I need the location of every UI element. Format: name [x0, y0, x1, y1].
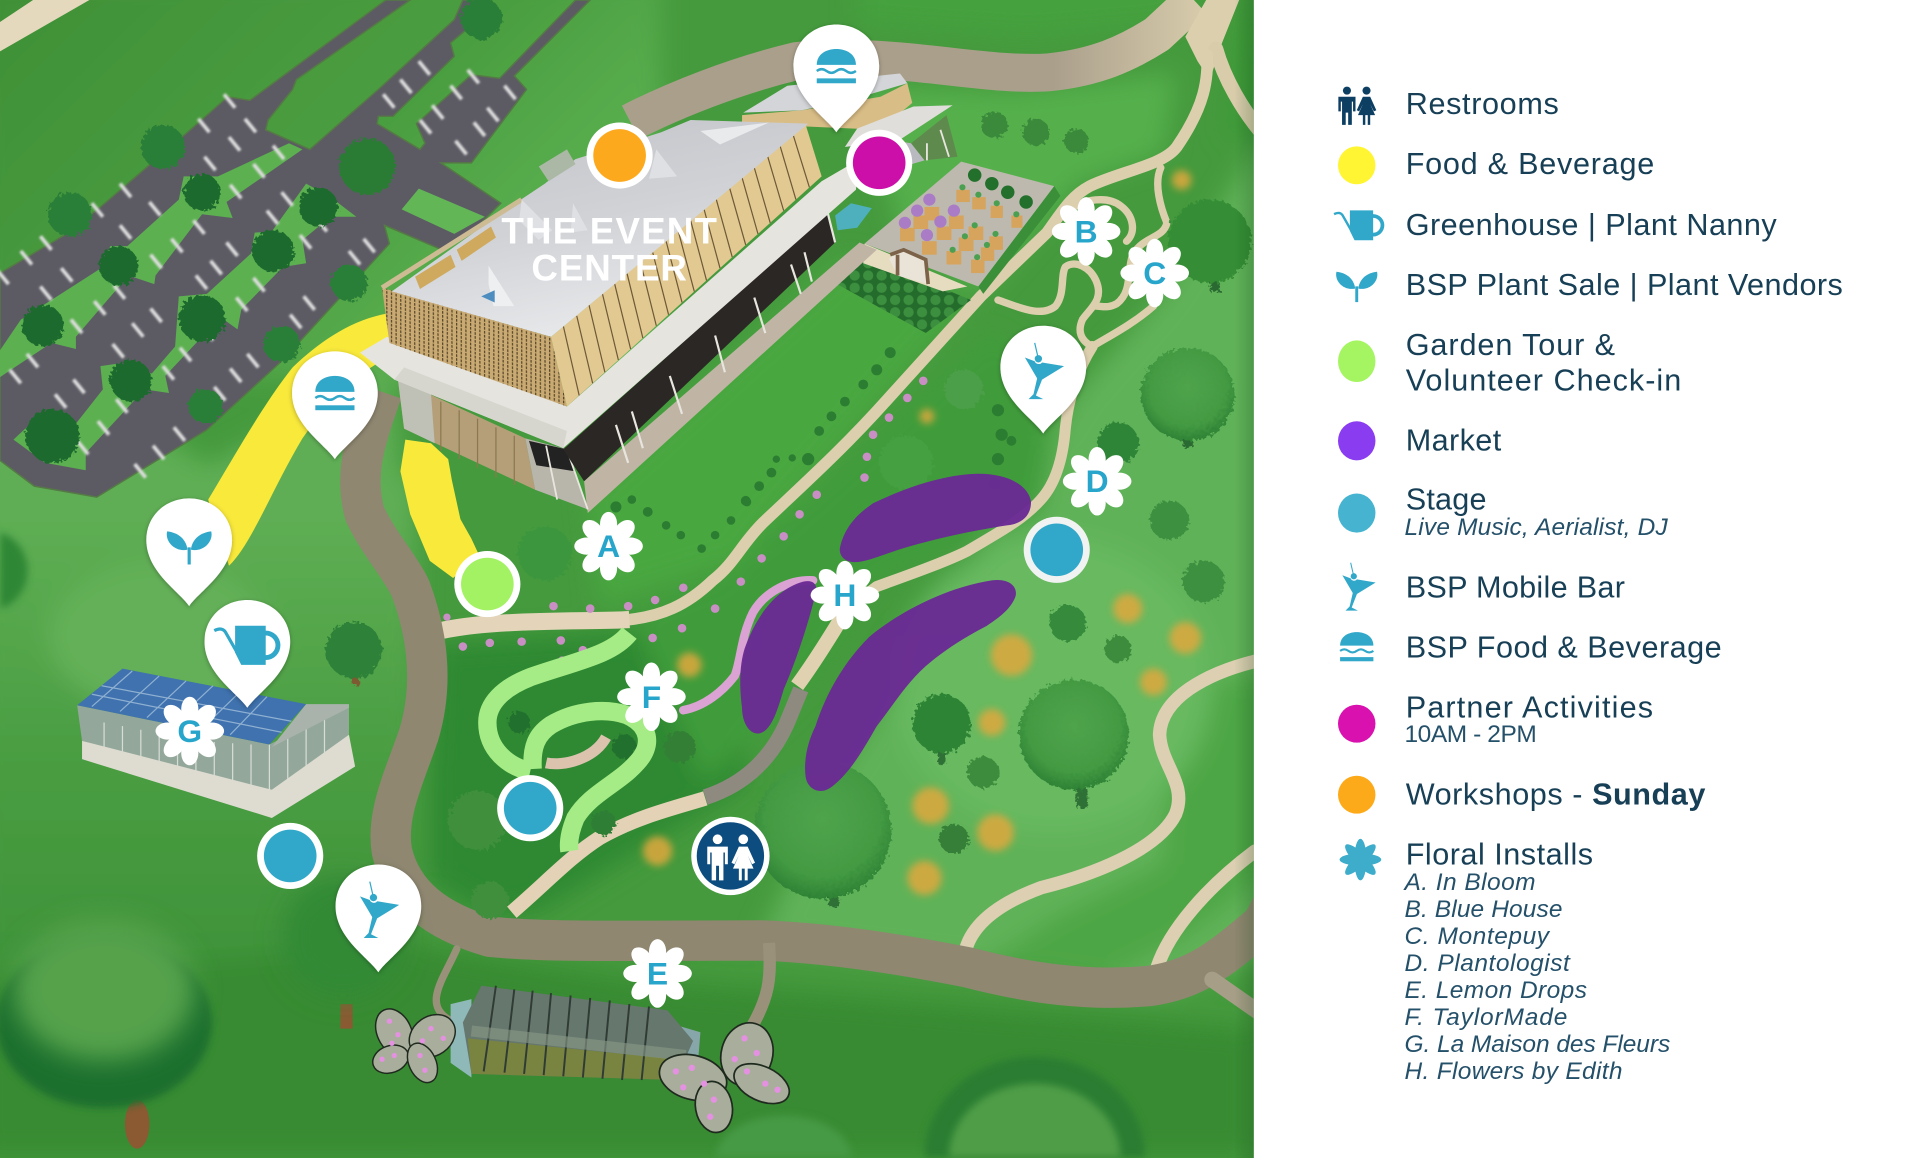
flower G: [156, 697, 224, 765]
building label: the event center: THE EVENT: [501, 211, 718, 252]
greenhouse G: [77, 669, 355, 818]
flower B: [1052, 197, 1120, 266]
butterfly left: [368, 1003, 464, 1087]
legend row: mobile bar: [1342, 563, 1625, 611]
legend row: greenhouse: Greenhouse | Plant Nanny: [1406, 208, 1777, 242]
legend row: floral installs: D. Plantologist: [1404, 950, 1571, 977]
marker: stage G: [257, 823, 323, 889]
legend row: plant sale: BSP Plant Sale | Plant Vendors: [1406, 268, 1843, 302]
legend row: food and beverage: Food & Beverage: [1406, 147, 1654, 181]
flower beds, dots and pink plantings: [443, 170, 1201, 895]
flower H: [811, 561, 879, 629]
legend row: garden tour: Volunteer Check-in: [1406, 364, 1681, 398]
conservatory E: [451, 986, 700, 1080]
paths: tan trails and gravel roads: [0, 0, 1261, 1031]
legend row: floral installs: E. Lemon Drops: [1404, 977, 1587, 1004]
marker: stage D: [1024, 517, 1090, 583]
pin: plant sale: [146, 498, 232, 606]
legend row: floral installs: B. Blue House: [1404, 896, 1562, 923]
legend row: market: [1338, 421, 1502, 460]
pin: burger left: [292, 351, 378, 459]
panel: garden map: [0, 0, 1273, 1158]
flower D: D: [1086, 463, 1109, 499]
building label: the event center: CENTER: [531, 247, 687, 288]
hedge and plaza: [833, 162, 1060, 333]
flower C: [1120, 239, 1189, 307]
legend row: stage: Stage: [1406, 482, 1487, 516]
parking lot: [0, 0, 590, 497]
legend row: garden tour: Garden Tour &: [1406, 328, 1615, 362]
legend row: floral installs: H. Flowers by Edith: [1404, 1058, 1622, 1085]
legend row: floral installs: A. In Bloom: [1402, 869, 1536, 896]
legend row: stage: Live Music, Aerialist, DJ: [1404, 514, 1669, 541]
marker: stage F: [497, 775, 563, 841]
flower G: G: [177, 713, 202, 749]
lawn areas: [0, 0, 1273, 1157]
legend row: floral installs: G. La Maison des Fleurs: [1404, 1031, 1670, 1058]
legend row: partner activities: [1338, 691, 1653, 748]
flower E: E: [647, 955, 668, 991]
legend row: partner activities: Partner Activities: [1406, 691, 1653, 725]
pin: burger top: [793, 24, 879, 132]
flower A: [574, 512, 643, 580]
garden tour route: light green: [487, 633, 647, 851]
flower F: [617, 662, 686, 731]
legend row: floral installs: [1340, 837, 1670, 1085]
round garden trees: [0, 111, 1251, 1157]
panel: legend: [1254, 0, 1920, 1158]
pin: mobile bar right: [1000, 326, 1086, 433]
flower D: [1063, 447, 1131, 516]
legend row: floral installs: C. Montepuy: [1404, 923, 1551, 950]
legend row: mobile bar: BSP Mobile Bar: [1406, 571, 1625, 605]
food and beverage zones: yellow: [208, 313, 480, 578]
marker: garden tour: [454, 551, 520, 617]
the event center building: [360, 73, 958, 513]
building label: the event center: [501, 211, 718, 288]
legend row: floral installs: F. TaylorMade: [1404, 1004, 1567, 1031]
legend row: market: Market: [1406, 424, 1502, 458]
flower B: B: [1075, 213, 1098, 249]
legend row: bsp food: BSP Food & Beverage: [1406, 631, 1722, 665]
market zones: purple: [740, 474, 1031, 791]
flower F: F: [642, 679, 661, 715]
legend row: restrooms: [1338, 87, 1559, 125]
flower C: C: [1143, 255, 1166, 291]
marker: restrooms: [691, 817, 770, 895]
flower E: [623, 939, 692, 1008]
marker: partner activities: [846, 130, 912, 196]
legend row: garden tour: [1338, 328, 1681, 398]
marker: workshops: [587, 122, 653, 189]
butterfly right: [654, 1017, 796, 1135]
parking trees: [22, 0, 502, 463]
pin: mobile bar left: [336, 864, 421, 972]
legend row: floral installs: Floral Installs: [1406, 837, 1593, 871]
legend row: workshops: Workshops - Sunday: [1406, 777, 1706, 811]
flower H: H: [833, 577, 856, 613]
legend row: partner activities: 10AM - 2PM: [1404, 721, 1537, 748]
flower A: A: [597, 528, 620, 564]
legend row: restrooms: Restrooms: [1406, 87, 1559, 121]
pin: greenhouse: [204, 600, 290, 708]
legend row: stage: [1338, 482, 1669, 541]
